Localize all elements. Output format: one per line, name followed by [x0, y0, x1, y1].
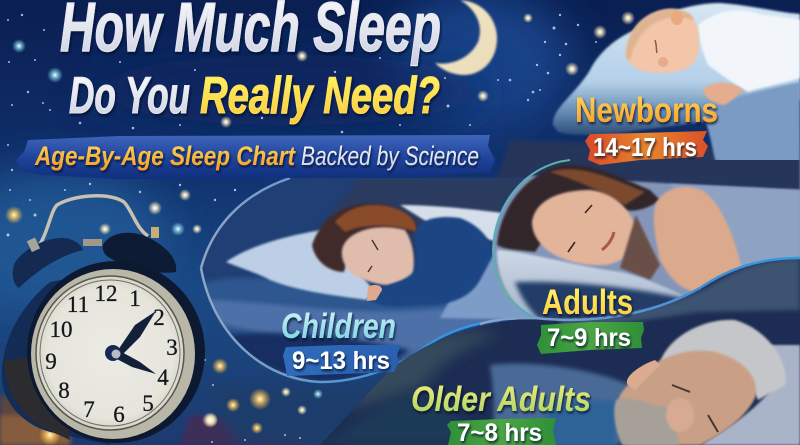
newborns heading: Newborns	[575, 91, 718, 130]
baby body: white onesie	[698, 10, 800, 92]
pillow under woman	[496, 249, 684, 318]
label: children	[281, 307, 401, 376]
clock bell: right	[103, 233, 176, 273]
back pillow	[400, 204, 500, 242]
clock bell: left	[13, 238, 83, 288]
panel: newborns	[553, 3, 800, 167]
title line 2 white: Do You	[69, 67, 190, 125]
subtitle orange text: Age-By-Age Sleep Chart	[34, 141, 296, 171]
panel: older adults	[320, 255, 800, 445]
older man hair	[660, 320, 786, 400]
clock numerals: 12	[94, 281, 118, 306]
label: adults	[537, 283, 644, 354]
child face	[342, 227, 414, 285]
clock body	[2, 270, 115, 445]
older adults heading: Older Adults	[411, 380, 591, 419]
clock numerals: 5	[142, 391, 154, 416]
baby hand	[703, 82, 744, 105]
clock numerals: 4	[157, 365, 169, 390]
label: newborns	[575, 91, 718, 165]
moon: crescent	[435, 0, 497, 75]
hair	[312, 203, 418, 272]
clock numerals: 7	[83, 397, 95, 422]
newborns tag	[585, 131, 708, 165]
wave divider: adults and older	[480, 258, 800, 324]
adults heading: Adults	[542, 283, 633, 322]
blanket	[700, 82, 800, 167]
child pyjamas	[374, 217, 495, 306]
older man face	[618, 351, 756, 445]
woman shoulder and arm	[654, 187, 742, 292]
newborns hours: 14~17 hrs	[593, 132, 697, 162]
panel: children	[202, 178, 531, 380]
clock face	[36, 276, 184, 430]
woman hair	[497, 165, 660, 252]
panel: adults	[494, 160, 800, 318]
title	[60, 0, 441, 125]
children tag	[283, 345, 401, 376]
children heading: Children	[281, 307, 396, 346]
clock numerals: 2	[153, 305, 165, 330]
subtitle white text: Backed by Science	[301, 141, 479, 171]
child panel outline	[201, 178, 500, 382]
title line 2 yellow: Really Need?	[200, 67, 440, 125]
clock numerals: 1	[129, 286, 141, 311]
clock numerals: 11	[67, 292, 89, 317]
woman face	[532, 190, 636, 265]
alarm clock	[2, 196, 205, 445]
light bedding at right	[440, 255, 531, 320]
clock numerals: 10	[50, 317, 72, 342]
label: older adults	[411, 380, 591, 445]
older adults tag	[447, 418, 556, 445]
baby head	[626, 9, 699, 73]
clock numerals: 8	[58, 378, 70, 403]
clock handle	[36, 196, 148, 250]
clock numerals	[45, 281, 178, 427]
stars field	[5, 11, 635, 445]
pillow	[700, 345, 800, 445]
adult panel outline	[493, 160, 570, 318]
clock hands	[105, 311, 156, 374]
bed sheet	[206, 276, 448, 374]
child pillow	[226, 230, 372, 300]
clock rim	[27, 261, 205, 443]
blanket	[490, 364, 630, 445]
children hours: 9~13 hrs	[292, 347, 390, 375]
subtitle ribbon	[16, 135, 495, 179]
adults tag	[537, 322, 644, 354]
pillow	[553, 3, 800, 135]
clock numerals: 9	[45, 349, 57, 374]
clock numerals: 6	[113, 402, 125, 427]
clock numerals: 3	[166, 335, 178, 360]
adults hours: 7~9 hrs	[547, 324, 631, 352]
